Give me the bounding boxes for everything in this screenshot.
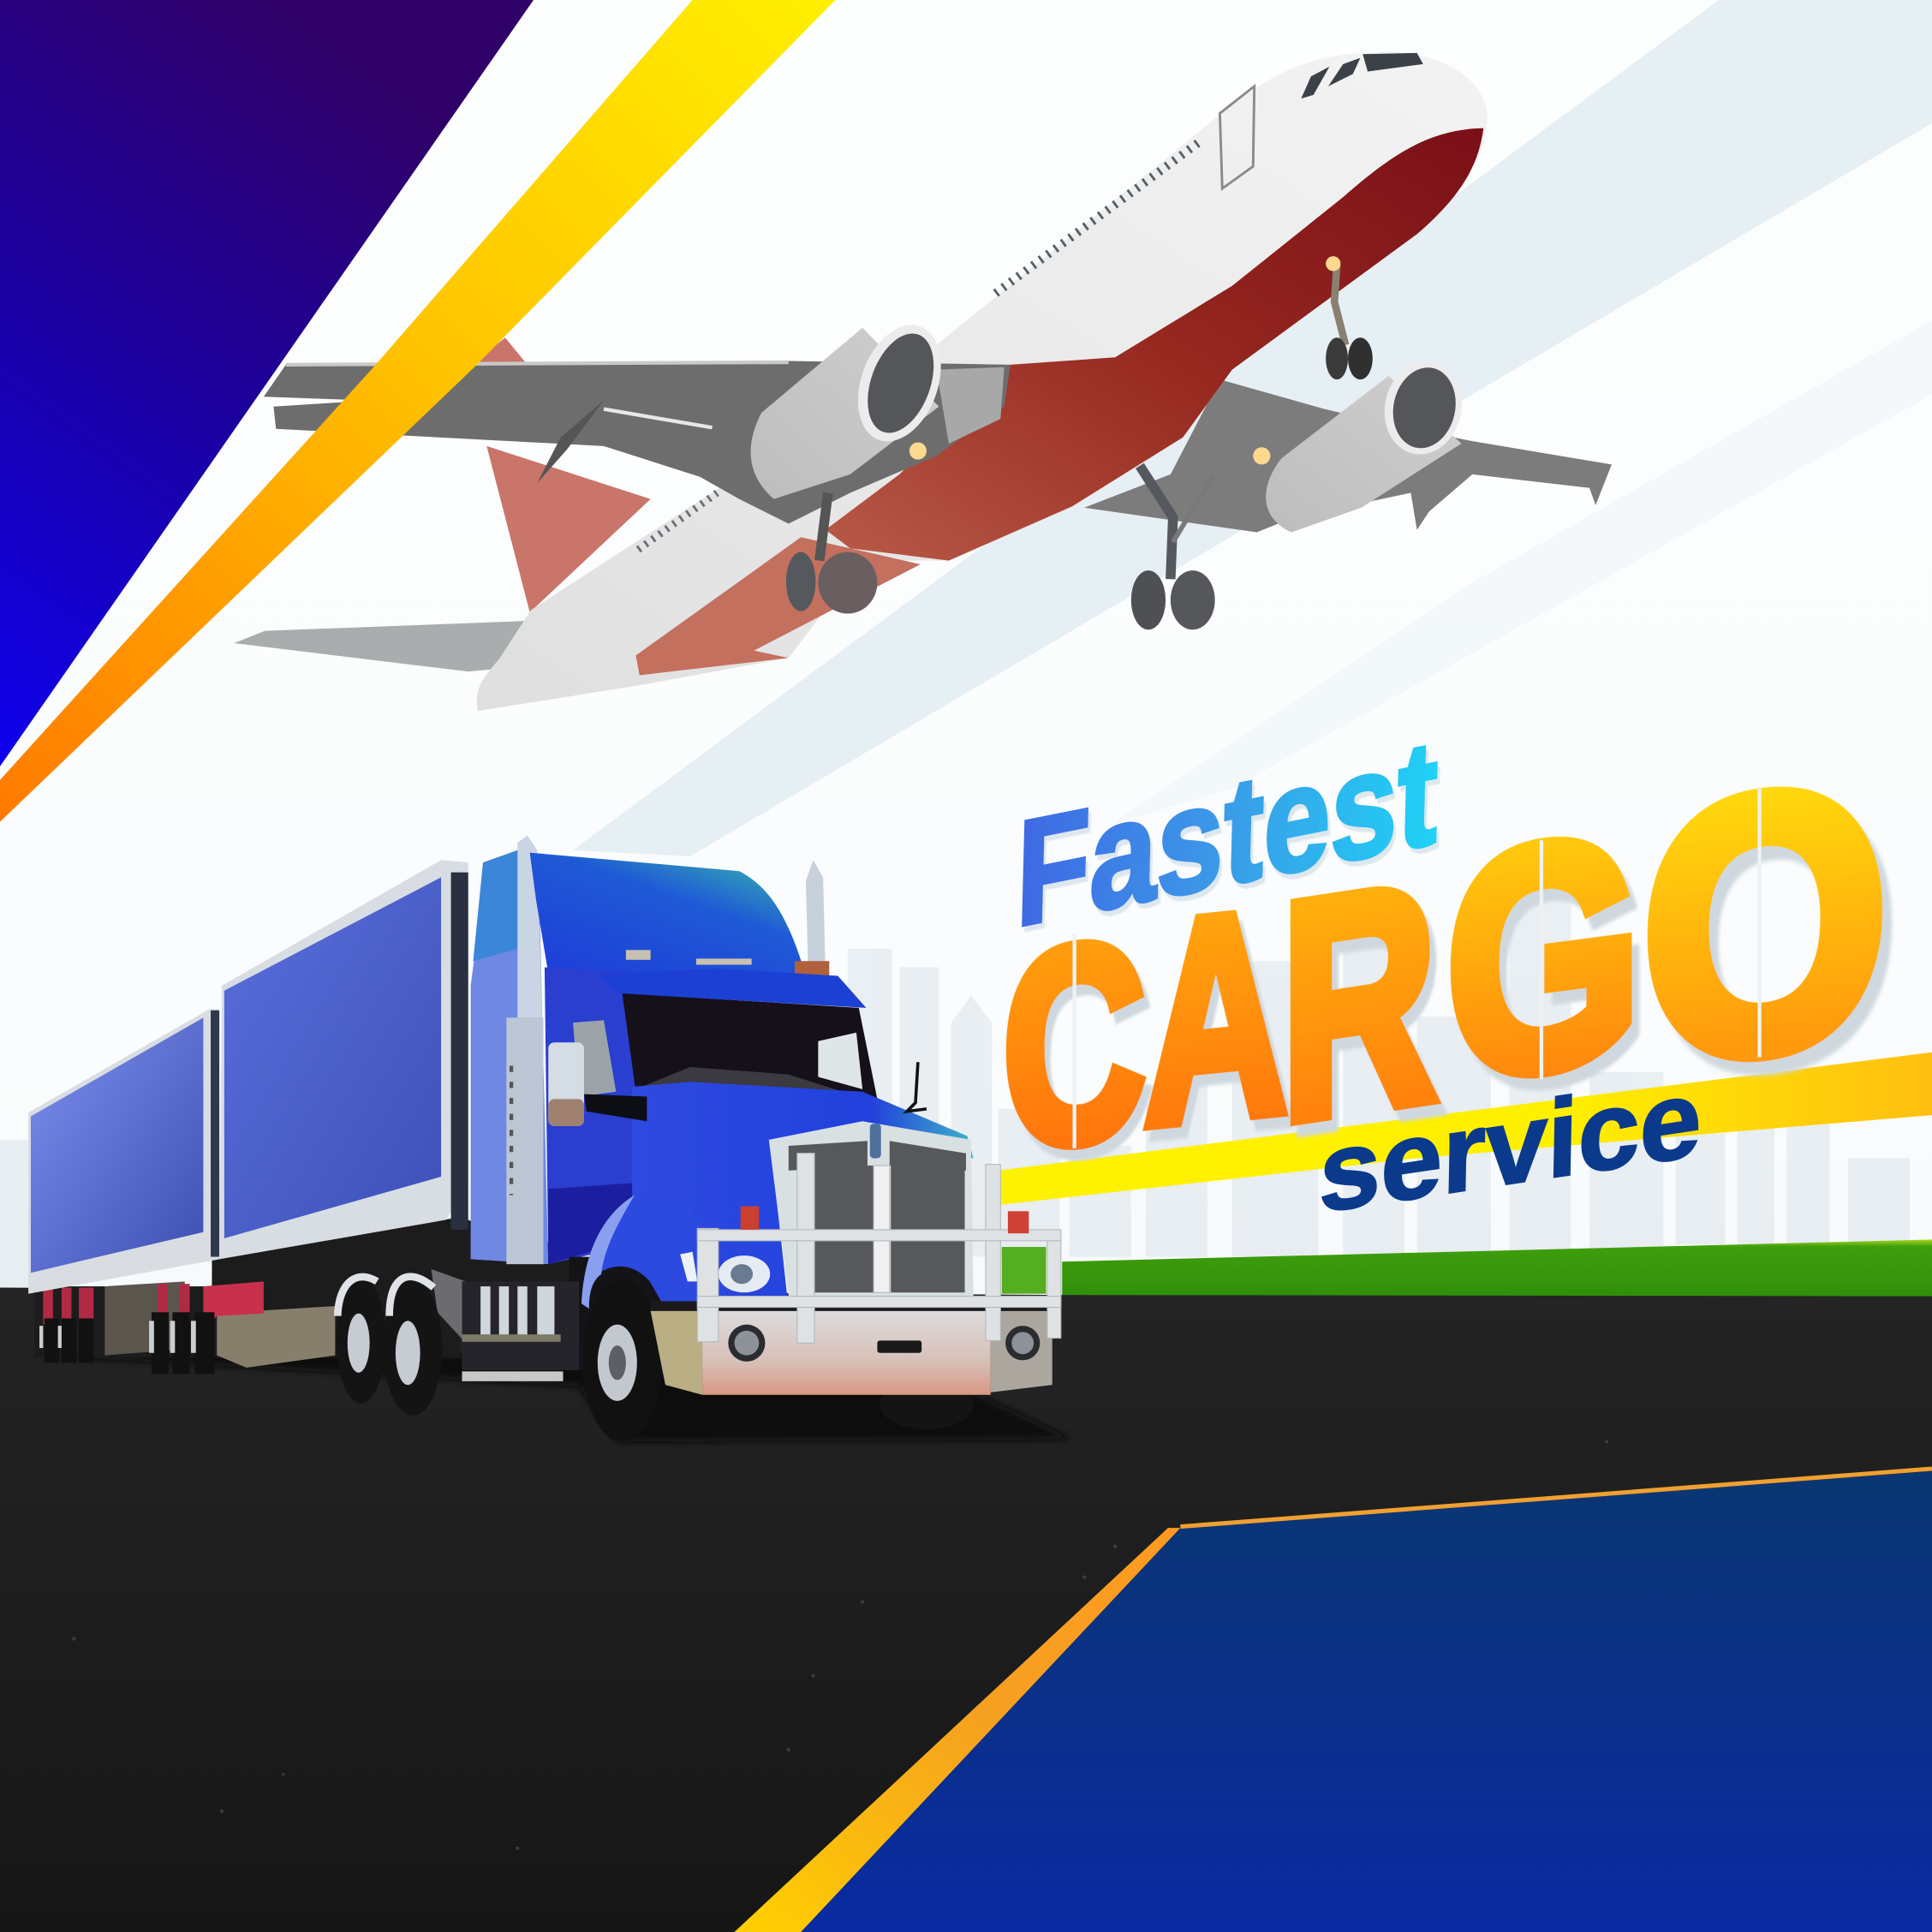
headlight — [680, 1252, 770, 1292]
green behind bull bar — [1002, 1247, 1046, 1294]
gold edge: top — [1180, 1469, 1932, 1527]
bull bar — [697, 1154, 1061, 1343]
right engine — [1266, 354, 1470, 533]
main gear right — [1131, 466, 1215, 629]
yellow orange stripe — [0, 0, 835, 822]
letter O: O — [1643, 709, 1887, 1140]
landing lights — [909, 256, 1340, 464]
number plate slot — [877, 1340, 921, 1353]
ground shadow — [37, 1343, 1072, 1441]
letter C: C — [1003, 881, 1145, 1208]
city skyline — [0, 887, 1910, 1290]
truck — [28, 835, 1072, 1441]
fender — [581, 1189, 730, 1309]
front trailer — [219, 860, 468, 1259]
bumper — [651, 1301, 1052, 1395]
undercarriage — [34, 1218, 579, 1374]
cabin windows — [996, 140, 1202, 293]
far wing — [1084, 379, 1612, 533]
blue panel bottom right — [735, 1469, 1932, 1932]
letter G: G — [1446, 767, 1641, 1147]
blue corner triangle — [0, 0, 534, 766]
letter R: R — [1281, 818, 1436, 1185]
wheel arch — [569, 1257, 693, 1370]
main gear left — [786, 493, 877, 614]
near wing — [264, 361, 1011, 523]
light beams — [573, 0, 1932, 856]
front wheel — [583, 1279, 662, 1441]
chrome stack — [517, 835, 542, 1017]
left engine — [751, 313, 956, 499]
aft red belly — [635, 537, 921, 675]
cockpit windows — [1301, 53, 1423, 98]
step panel — [506, 1017, 543, 1264]
road speckles — [72, 1440, 1608, 1850]
cab door — [545, 967, 635, 1264]
windshield — [623, 993, 877, 1099]
fuel tank and steps — [462, 1281, 579, 1381]
right exhaust stack — [806, 860, 826, 974]
far front wheel — [880, 1380, 974, 1429]
sun visor — [598, 969, 866, 1008]
forward door — [1219, 86, 1255, 188]
rear trailer — [28, 1009, 219, 1294]
heading: CARGO — [1003, 709, 1887, 1208]
airplane — [234, 51, 1612, 711]
mirror — [548, 1042, 647, 1126]
grille surround — [769, 1121, 974, 1297]
flap fairing — [537, 401, 604, 483]
sleeper fairing — [471, 835, 548, 1264]
horizontal stabilizer — [234, 620, 558, 671]
green verge — [1062, 1239, 1932, 1297]
cab marker light — [741, 1207, 759, 1230]
hood badge — [870, 1124, 881, 1158]
tail fin — [474, 337, 651, 612]
rear drive wheels — [337, 1269, 466, 1416]
nose gear — [1326, 265, 1373, 379]
antenna — [907, 1062, 927, 1112]
fuselage — [477, 51, 1488, 711]
side window — [573, 1020, 616, 1097]
hood — [632, 1082, 974, 1309]
letter A: A — [1145, 850, 1287, 1185]
gold edge: diagonal — [735, 1528, 1180, 1932]
yellow swoosh — [998, 1052, 1932, 1205]
subheading: service: service — [1318, 1054, 1702, 1237]
fog lights — [728, 1325, 765, 1362]
radiator grille — [789, 1141, 966, 1292]
asphalt road — [0, 1288, 1932, 1932]
heading: Fastest: Fastest — [1015, 707, 1440, 958]
stencil gaps — [1075, 789, 1760, 1148]
cab roof — [530, 853, 806, 976]
red belly — [826, 128, 1483, 561]
roof lights — [626, 950, 829, 976]
